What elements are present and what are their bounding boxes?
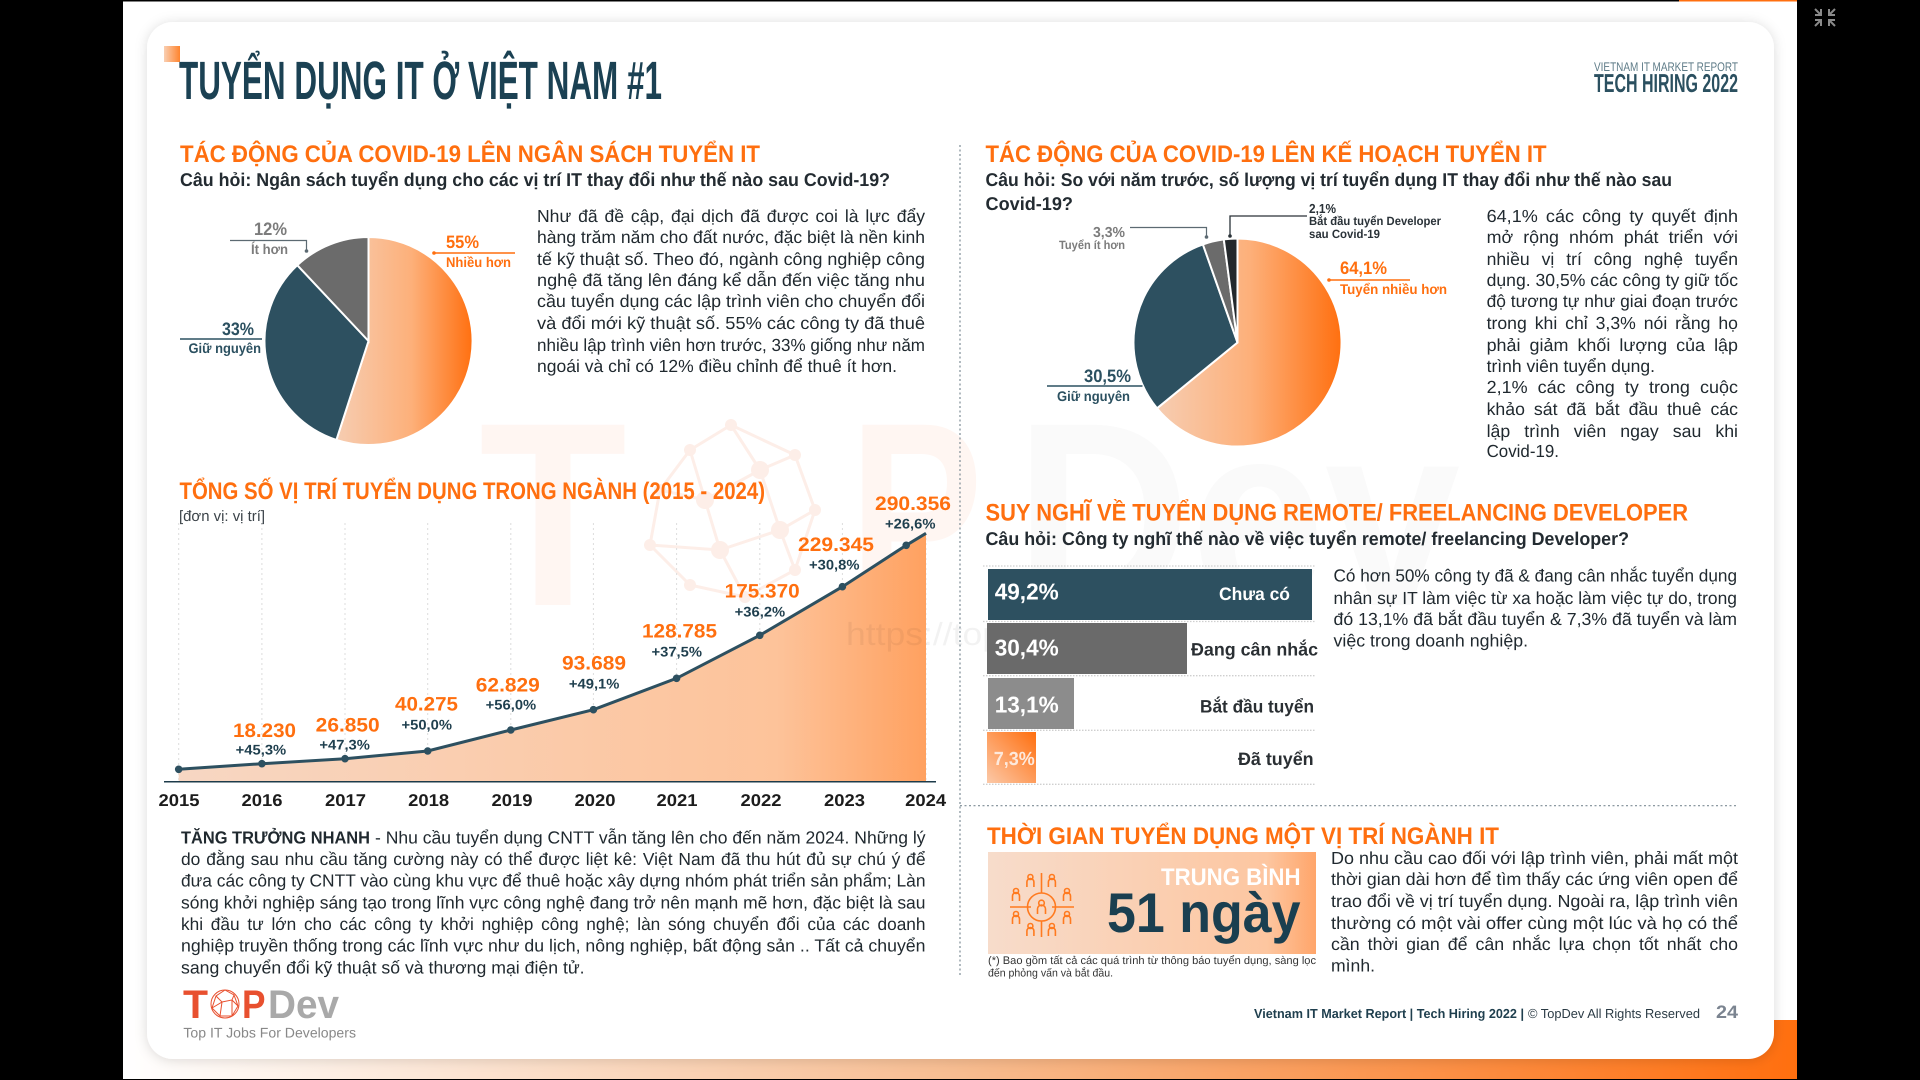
text: budget explanation: hàng trăm năm cho đất nước, đặc biệt là nền kinh <box>537 227 925 247</box>
bar: not yet: Chưa có <box>1219 584 1290 604</box>
growth rates: +36,2% <box>735 604 786 620</box>
footer: 24 <box>1716 1002 1738 1022</box>
label: 2.1% started: Bắt đầu tuyển Developer <box>1309 214 1441 228</box>
logo: TopDev: T <box>183 983 208 1027</box>
label: 2.1% started: sau Covid-19 <box>1309 227 1380 241</box>
icon: target people <box>1010 873 1074 937</box>
watermark: TopDev logo: T <box>479 368 627 661</box>
question: hiring plan: Câu hỏi: So với năm trước, số lượng vị trí tuyển dụng IT thay đổi như thế nào sau <box>986 169 1672 190</box>
text: hiring plan explanation: 64,1% các công ty quyết định <box>1487 206 1738 226</box>
bar: starting: 13,1% <box>995 691 1059 717</box>
title: TUYỂN DỤNG IT Ở VIỆT NAM #1 <box>179 50 662 111</box>
label: 64.1% more <box>1327 258 1447 297</box>
label: 33% same: Giữ nguyên <box>188 340 261 356</box>
x axis years <box>158 791 947 810</box>
label: 3.3% less: Tuyển ít hơn <box>1059 238 1125 252</box>
label: 12% less <box>230 219 308 257</box>
panel: job positions line chart <box>158 477 951 810</box>
label: 33% same <box>180 319 262 356</box>
heading: total positions: TỔNG SỐ VỊ TRÍ TUYỂN DỤNG TRONG NGÀNH (2015 - 2024) <box>180 477 765 505</box>
footer <box>1254 1002 1738 1022</box>
watermark: url: https://top <box>846 616 1002 652</box>
unit note: [đơn vị: vị trí] <box>179 508 265 525</box>
text block: fast growth: - Nhu cầu tuyển dụng CNTT vẫn tăng lên cho đến năm 2024. Những lý <box>375 827 926 847</box>
bar: considering: 30,4% <box>995 635 1059 661</box>
text: time to hire explanation: trao đổi về vị trí tuyển dụng. Ngoài ra, lập trình viên <box>1331 891 1738 911</box>
text: hiring plan explanation: khảo sát đã bắt đầu thuê các <box>1487 399 1738 419</box>
x axis years: 2023 <box>824 791 865 810</box>
text: time to hire explanation: cần thời gian để cân nhắc lựa chọn tốt nhất cho <box>1331 934 1738 954</box>
values: 290.356 <box>875 493 951 515</box>
growth rates: +45,3% <box>236 741 287 757</box>
label: 12% less: 12% <box>254 219 287 239</box>
text: budget explanation: tế kỹ thuật số. Theo đó, ngành công nghiệp công <box>537 249 925 269</box>
label: 30.5% same: 30,5% <box>1084 366 1131 386</box>
label: 30.5% same <box>1047 366 1142 404</box>
label: 30.5% same: Giữ nguyên <box>1057 388 1130 404</box>
bar: not yet <box>988 569 1312 620</box>
bar: considering: Đang cân nhắc <box>1191 639 1318 660</box>
x axis years: 2015 <box>158 791 200 810</box>
logo: TopDev: P <box>242 983 266 1027</box>
x axis years: 2019 <box>492 791 532 810</box>
text: remote explanation: đó 13,1% đã bắt đầu tuyển & 7,3% đã tuyển và làm <box>1334 609 1737 629</box>
text: hiring plan explanation: lập trình viên ngay sau khi <box>1487 421 1738 441</box>
text: budget explanation: ngoái và chỉ có 12% điều chỉnh để thuê ít hơn. <box>537 356 897 376</box>
logo: TopDev: Dev <box>268 983 340 1027</box>
logo: TopDev <box>183 983 356 1041</box>
text: budget explanation: cầu tuyển dụng các lập trình viên cho chuyển đổi <box>537 291 925 311</box>
text: budget explanation: nhiều lập trình viên hơn trước, 33% giống như năm <box>537 335 925 355</box>
footnote <box>988 955 1317 980</box>
panel: time to hire <box>987 822 1738 980</box>
text block: fast growth: sóng khởi nghiệp sáng tạo trong lĩnh vực công nghệ đang trở nên mạnh mẽ hơn, đặc biệt là sau <box>181 892 926 912</box>
x axis years: 2020 <box>574 791 616 810</box>
callout: 51 days: TRUNG BÌNH <box>1161 863 1300 891</box>
question: remote: Câu hỏi: Công ty nghĩ thế nào về việc tuyển remote/ freelancing Developer? <box>986 528 1629 549</box>
values: 229.345 <box>798 534 874 556</box>
logo: TopDev: Top IT Jobs For Developers <box>183 1025 356 1041</box>
text: time to hire explanation: thời gian dài hơn để tìm thấy các ứng viên open để <box>1331 869 1738 889</box>
panel: covid impact on budget <box>180 140 925 445</box>
growth rates: +26,6% <box>885 515 936 531</box>
label: 2.1% started: 2,1% <box>1309 201 1336 216</box>
footer: Vietnam IT Market Report | Tech Hiring 2022 | <box>1254 1006 1524 1021</box>
text: remote explanation <box>1334 566 1737 651</box>
text: hiring plan explanation: mở rộng nhóm phát triển với <box>1487 227 1738 247</box>
heading: time to hire: THỜI GIAN TUYỂN DỤNG MỘT VỊ TRÍ NGÀNH IT <box>987 822 1499 850</box>
text block: fast growth: khi đầu tư lớn cho các công ty khởi nghiệp công nghệ; làn sóng chuyển đổi của các doanh <box>181 914 926 934</box>
watermark: TopDev logo <box>479 368 1462 661</box>
values <box>233 493 951 742</box>
heading: hiring plan: TÁC ĐỘNG CỦA COVID-19 LÊN KẾ HOẠCH TUYỂN IT <box>986 140 1547 168</box>
text: hiring plan explanation: trong khi chỉ 3,3% nói rằng họ <box>1487 313 1738 333</box>
text: hiring plan explanation: nhiều vị trí công nghệ tuyển <box>1487 249 1738 269</box>
label: 64.1% more: Tuyển nhiều hơn <box>1340 281 1447 297</box>
label: 64.1% more: 64,1% <box>1340 258 1387 278</box>
decorative title square <box>164 46 180 62</box>
x axis years: 2021 <box>656 791 698 810</box>
text: remote explanation: nhân sự IT làm việc từ xa hoặc làm việc tự do, trong <box>1334 588 1737 608</box>
x axis years: 2024 <box>905 791 947 810</box>
icon: fullscreen toggle <box>1815 9 1835 26</box>
text block: fast growth: nghiệp truyền thống trong các lĩnh vực như du lịch, nông nghiệp, bất động sản .. Tất cả chuyển <box>181 936 926 956</box>
footnote: đến phỏng vấn và bắt đầu. <box>988 967 1113 980</box>
heading: budget: TÁC ĐỘNG CỦA COVID-19 LÊN NGÂN SÁCH TUYỂN IT <box>180 140 760 168</box>
pie chart: budget <box>265 237 473 445</box>
label: 33% same: 33% <box>222 319 254 339</box>
text: hiring plan explanation: dụng. 30,5% các công ty giữ tốc <box>1487 270 1738 290</box>
text: budget explanation: và đổi mới kỹ thuật số. 55% các công ty đã thuê <box>537 313 925 333</box>
x axis years: 2018 <box>408 791 449 810</box>
bar: not yet: 49,2% <box>995 578 1059 604</box>
footnote: (*) Bao gồm tất cả các quá trình từ thông báo tuyển dụng, sàng lọc <box>988 955 1317 967</box>
growth rates: +49,1% <box>569 675 620 691</box>
watermark: TopDev logo: P <box>849 368 983 661</box>
text: hiring plan explanation: phải giảm khối lượng của lập <box>1487 335 1738 355</box>
values: 62.829 <box>476 675 540 697</box>
text: hiring plan explanation <box>1487 206 1738 461</box>
values: 40.275 <box>395 694 458 716</box>
x axis years: 2016 <box>242 791 282 810</box>
growth rates <box>236 515 936 757</box>
bar: starting <box>988 678 1314 729</box>
text: hiring plan explanation: 2,1% các công ty trong cuộc <box>1487 377 1738 397</box>
panel: remote and freelancing <box>983 499 1737 784</box>
report brand: TECH HIRING 2022 <box>1594 68 1738 98</box>
label: 3.3% less <box>1059 225 1208 252</box>
area chart <box>164 533 936 782</box>
values: 26.850 <box>316 715 380 737</box>
label: 55% more: Nhiều hơn <box>446 254 511 270</box>
pie chart: hiring plan <box>1134 238 1342 446</box>
text: remote explanation: việc trong doanh nghiệp. <box>1334 631 1528 651</box>
bar: hired <box>987 732 1314 783</box>
text: hiring plan explanation: độ tương tự như giai đoạn trước <box>1487 291 1738 311</box>
question: budget: Câu hỏi: Ngân sách tuyển dụng cho các vị trí IT thay đổi như thế nào sau Covid-19? <box>180 169 890 190</box>
growth rates: +37,5% <box>652 644 703 660</box>
bar: starting: Bắt đầu tuyển <box>1200 696 1314 717</box>
text block: fast growth: đưa các công ty CNTT vào cùng khu vực để thuê hoặc xây dựng nhóm phát triển sản phẩm; Làn <box>181 871 926 891</box>
text block: fast growth: TĂNG TRƯỞNG NHANH <box>181 827 370 847</box>
question: hiring plan <box>986 169 1672 214</box>
x axis years: 2017 <box>325 791 366 810</box>
growth rates: +30,8% <box>809 556 860 572</box>
icon: logo network globe <box>211 990 239 1018</box>
report brand: VIETNAM IT MARKET REPORT <box>1594 60 1738 74</box>
heading: remote: SUY NGHĨ VỀ TUYỂN DỤNG REMOTE/ FREELANCING DEVELOPER <box>986 499 1688 527</box>
label: 12% less: Ít hơn <box>251 241 288 257</box>
footer: © TopDev All Rights Reserved <box>1528 1006 1700 1021</box>
text: time to hire explanation: thường có một vài offer cùng một lúc và họ có thể <box>1331 913 1738 933</box>
text: budget explanation <box>537 206 925 376</box>
callout: 51 days: 51 ngày <box>1107 881 1300 944</box>
label: 55% more <box>432 232 515 270</box>
bar: hired: Đã tuyển <box>1238 749 1314 769</box>
watermark: TopDev logo: Dev <box>1015 368 1462 661</box>
bar: hired: 7,3% <box>994 749 1035 770</box>
text: remote explanation: Có hơn 50% công ty đã & đang cân nhắc tuyển dụng <box>1334 566 1737 586</box>
callout: 51 days <box>988 852 1316 954</box>
values: 128.785 <box>642 621 717 643</box>
panel: covid impact on hiring plan <box>986 140 1738 461</box>
values: 175.370 <box>725 581 800 603</box>
text block: fast growth <box>181 827 926 977</box>
question: hiring plan: Covid-19? <box>986 193 1073 214</box>
label: 55% more: 55% <box>446 232 479 252</box>
label: 2.1% started <box>1228 201 1441 241</box>
values: 18.230 <box>233 720 296 742</box>
bar chart <box>987 569 1318 783</box>
growth rates: +56,0% <box>486 696 537 712</box>
label: 3.3% less: 3,3% <box>1093 225 1125 241</box>
text: hiring plan explanation: Covid-19. <box>1487 441 1559 461</box>
bar: considering <box>987 623 1318 674</box>
text: budget explanation: Như đã đề cập, đại dịch đã được coi là lực đẩy <box>537 206 925 226</box>
text block: fast growth: do đằng sau nhu cầu tăng cường này có thể được liệt kê: Việt Nam đã thu hút đủ sự chú ý để <box>181 849 926 869</box>
text: budget explanation: nghệ đã tăng lên đáng kể dẫn đến việc tăng nhu <box>537 270 925 290</box>
values: 93.689 <box>562 652 626 674</box>
growth rates: +50,0% <box>402 716 453 732</box>
text: time to hire explanation <box>1331 848 1738 976</box>
x axis years: 2022 <box>740 791 782 810</box>
growth rates: +47,3% <box>319 736 370 752</box>
text: time to hire explanation: mình. <box>1331 956 1375 976</box>
report brand <box>1594 60 1738 98</box>
text: time to hire explanation: Do nhu cầu cao đối với lập trình viên, phải mất một <box>1331 848 1738 868</box>
text block: fast growth: sang chuyển đổi kỹ thuật số và thương mại điện tử. <box>181 957 585 977</box>
text: hiring plan explanation: trình viên tuyển dụng. <box>1487 356 1655 376</box>
